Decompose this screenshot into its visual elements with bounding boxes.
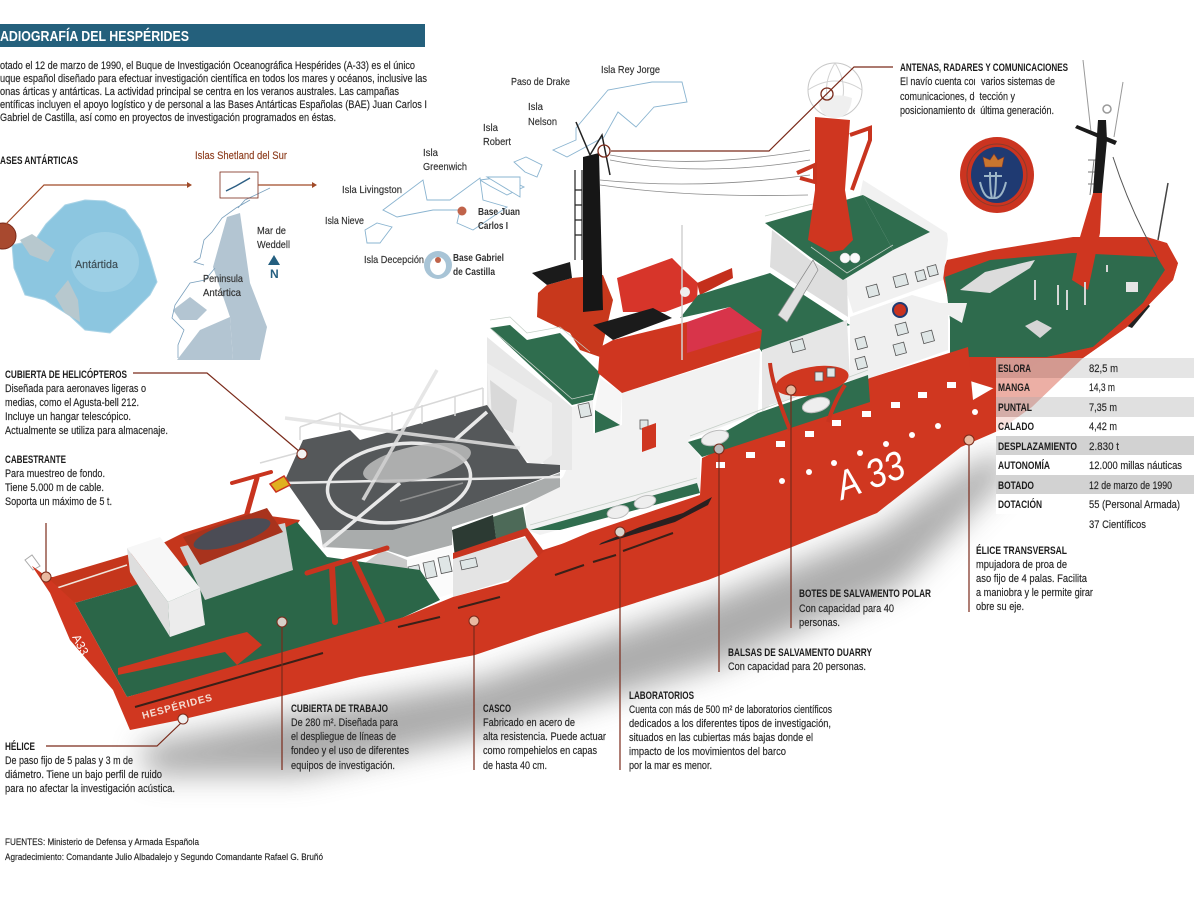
callout: laboratorios: LABORATORIOS bbox=[629, 690, 694, 702]
radar tower block bbox=[765, 180, 948, 317]
callout: antenas, radares y comunicaciones: El navío cuenta con varios sistemas de bbox=[900, 76, 1055, 88]
white container bbox=[127, 537, 205, 637]
table: ship specifications: 55 (Personal Armada) bbox=[1089, 499, 1180, 511]
callout: cubierta de helicópteros: Incluye un hangar telescópico. bbox=[5, 411, 131, 423]
intro text: uque español diseñado para efectuar investigación científica en todos los mares y océanos, inclusive las bbox=[0, 73, 427, 85]
map heading: bases antárticas: ASES ANTÁRTICAS bbox=[0, 154, 78, 167]
hull portholes bbox=[716, 382, 978, 484]
map labels: Isla Rey Jorge bbox=[601, 64, 660, 76]
sources: Agradecimiento: Comandante Julio Albadalejo y Segundo Comandante Rafael G. Bruñó bbox=[5, 852, 323, 862]
map arrow: locator to islands bbox=[258, 182, 317, 188]
callout: cabestrante: Tiene 5.000 m de cable. bbox=[5, 482, 104, 494]
callout: casco: Fabricado en acero de bbox=[483, 717, 575, 729]
callout: cabestrante: Soporta un máximo de 5 t. bbox=[5, 496, 112, 508]
callout: laboratorios: impacto de los movimientos del barco bbox=[629, 746, 786, 758]
mid white block bbox=[762, 295, 967, 412]
inset locator: South Shetland: Islas Shetland del Sur bbox=[195, 150, 287, 162]
callout: cubierta de helicópteros: medias, como el Agusta-bell 212. bbox=[5, 397, 139, 409]
callout: laboratorios: Cuenta con más de 500 m² de laboratorios científicos bbox=[629, 704, 832, 716]
stern marking: A33: A33 bbox=[69, 632, 92, 658]
callout: cabestrante bbox=[5, 454, 112, 582]
flag bbox=[270, 476, 290, 492]
map labels: Isla bbox=[483, 122, 498, 134]
callout: cabestrante: Para muestreo de fondo. bbox=[5, 468, 105, 480]
map labels: Nelson bbox=[528, 116, 557, 128]
callout: cubierta de trabajo: el despliegue de líneas de bbox=[291, 731, 396, 743]
radar mast bbox=[797, 63, 870, 263]
callout: casco: alta resistencia. Puede actuar bbox=[483, 731, 606, 743]
sources bbox=[5, 837, 323, 862]
hangar roof deck bbox=[490, 325, 600, 405]
rub rail dashes bbox=[135, 533, 673, 707]
table: ship specifications: 14,3 m bbox=[1089, 382, 1115, 394]
map labels: Isla Livingston bbox=[342, 184, 402, 196]
map: Antarctic Peninsula bbox=[172, 188, 270, 360]
middle green deck bbox=[680, 273, 850, 352]
callout: botes de salvamento polar bbox=[786, 385, 931, 629]
table: ship specifications: AUTONOMÍA bbox=[998, 459, 1050, 472]
inset locator: South Shetland bbox=[195, 150, 287, 198]
aft crane bbox=[232, 472, 271, 517]
callout: laboratorios: situados en las cubiertas más bajas donde el bbox=[629, 732, 813, 744]
helideck understructure bbox=[320, 473, 580, 607]
callout: hélice transversal: a maniobra y le permite girar bbox=[976, 587, 1093, 599]
hangar bbox=[487, 363, 552, 468]
callout: cubierta de trabajo bbox=[277, 617, 409, 772]
sources: FUENTES: Ministerio de Defensa y Armada Española bbox=[5, 837, 199, 847]
map: South Shetland Islands bbox=[365, 82, 687, 279]
table: ship specifications: DESPLAZAMIENTO bbox=[998, 441, 1077, 453]
callout: cubierta de trabajo: De 280 m². Diseñada para bbox=[291, 717, 399, 729]
map labels: Base Gabriel bbox=[453, 252, 504, 264]
text: Mar de Weddell: Weddell bbox=[257, 239, 290, 251]
rear funnel block bbox=[532, 258, 733, 357]
map: Antarctica continent bbox=[0, 200, 157, 333]
lab window recess bbox=[599, 497, 712, 545]
grey container bbox=[180, 523, 293, 600]
callout: laboratorios: por la mar es menor. bbox=[629, 760, 712, 772]
callout: botes de salvamento polar: Con capacidad para 40 bbox=[799, 603, 894, 615]
callout: hélice bbox=[5, 714, 188, 795]
table: ship specifications: 2.830 t bbox=[1089, 441, 1119, 453]
hull bbox=[32, 263, 1178, 730]
table: ship specifications: 12.000 millas náuticas bbox=[1089, 460, 1182, 472]
forward red block bbox=[593, 225, 762, 393]
text: Mar de Weddell bbox=[257, 225, 290, 251]
hull marking: HESPÉRIDES: HESPÉRIDES bbox=[140, 691, 214, 722]
callout: balsas de salvamento Duarry: Con capacidad para 20 personas. bbox=[728, 661, 866, 673]
fore deck bbox=[945, 253, 1165, 357]
callout: laboratorios: dedicados a los diferentes tipos de investigación, bbox=[629, 718, 831, 730]
intro text: otado el 12 de marzo de 1990, el Buque de Investigación Oceanográfica Hespérides (A-33) es el único bbox=[0, 60, 415, 72]
callout: laboratorios bbox=[615, 527, 832, 772]
callout: hélice: diámetro. Tiene un bajo perfil de ruido bbox=[5, 769, 162, 781]
intro text: onas árticas y antárticas. La actividad principal se centra en los veranos australes. Las campañas bbox=[0, 86, 399, 98]
foremast bbox=[1072, 60, 1168, 290]
map labels: Paso de Drake bbox=[511, 76, 570, 88]
title bar bbox=[0, 24, 425, 47]
callout: hélice transversal: obre su eje. bbox=[976, 601, 1024, 613]
callout: casco: CASCO bbox=[483, 703, 511, 715]
boat in cradle bbox=[183, 508, 283, 565]
intro text bbox=[0, 60, 427, 124]
callout: cubierta de trabajo: equipos de investigación. bbox=[291, 760, 395, 772]
table: ship specifications: CALADO bbox=[998, 421, 1034, 433]
map labels: Isla bbox=[528, 101, 543, 113]
table: ship specifications: 12 de marzo de 1990 bbox=[1089, 480, 1172, 492]
table: ship specifications: PUNTAL bbox=[998, 402, 1032, 414]
callout: hélice transversal: ÉLICE TRANSVERSAL bbox=[976, 544, 1067, 557]
callout: casco: de hasta 40 cm. bbox=[483, 760, 547, 772]
callout: hélice transversal bbox=[964, 435, 1093, 613]
T-frame bbox=[307, 548, 387, 622]
callout: botes de salvamento polar: personas. bbox=[799, 617, 840, 629]
map: Antarctic Peninsula: Antártica bbox=[203, 287, 241, 299]
table: ship specifications bbox=[996, 358, 1194, 531]
black aft mast bbox=[575, 122, 610, 312]
table: ship specifications: 7,35 m bbox=[1089, 402, 1117, 414]
callout: cubierta de helicópteros: Diseñada para aeronaves ligeras o bbox=[5, 383, 146, 395]
map labels: de Castilla bbox=[453, 266, 495, 278]
hull marking: A33: A 33 bbox=[828, 443, 911, 509]
table: ship specifications: 4,42 m bbox=[1089, 421, 1117, 433]
callout: antenas, radares y comunicaciones bbox=[598, 62, 1068, 157]
map labels: Robert bbox=[483, 136, 511, 148]
superstructure white wall bbox=[487, 337, 760, 535]
map labels: Isla bbox=[423, 147, 438, 159]
callout: hélice: De paso fijo de 5 palas y 3 m de bbox=[5, 755, 133, 767]
callout: cabestrante: CABESTRANTE bbox=[5, 454, 66, 466]
icon: north arrow: N bbox=[270, 267, 279, 281]
map: Antarctica continent: Antártida bbox=[75, 259, 119, 271]
map labels: Isla Nieve bbox=[325, 215, 364, 227]
callout: casco bbox=[469, 616, 606, 772]
side deck strips bbox=[530, 370, 870, 530]
aft mast cables bbox=[600, 150, 810, 196]
work deck crane arm bbox=[118, 632, 262, 675]
map labels: Greenwich bbox=[423, 161, 467, 173]
callout: cubierta de helicópteros: Actualmente se utiliza para almacenaje. bbox=[5, 425, 168, 437]
map labels: Isla Decepción bbox=[364, 254, 424, 266]
helicopter bbox=[285, 370, 520, 501]
callout: balsas de salvamento Duarry bbox=[714, 444, 872, 673]
intro text: entíficas incluyen el apoyo logístico y de personal a las Bases Antárticas Españolas (BAE) Juan Carlos I bbox=[0, 99, 427, 111]
intro text: Gabriel de Castilla, así como en proyectos de investigación programados en éstas. bbox=[0, 112, 336, 124]
hull shadow bbox=[140, 452, 1010, 775]
callout: hélice transversal: mpujadora de proa de bbox=[976, 559, 1067, 571]
table: ship specifications: BOTADO bbox=[998, 480, 1034, 492]
callout: cubierta de trabajo: CUBIERTA DE TRABAJO bbox=[291, 703, 388, 715]
fore deck fittings bbox=[960, 260, 1150, 338]
ship illustration bbox=[25, 60, 1178, 775]
table: ship specifications: MANGA bbox=[998, 382, 1030, 394]
callout: balsas de salvamento Duarry: BALSAS DE SALVAMENTO DUARRY bbox=[728, 647, 872, 659]
callout: botes de salvamento polar: BOTES DE SALVAMENTO POLAR bbox=[799, 588, 931, 600]
icon: north arrow bbox=[268, 255, 280, 281]
callout: hélice: para no afectar la investigación acústica. bbox=[5, 783, 175, 795]
map labels: Base Juan bbox=[478, 206, 520, 218]
text: Mar de Weddell: Mar de bbox=[257, 225, 286, 237]
map: Antarctic Peninsula: Peninsula bbox=[203, 273, 243, 285]
table: ship specifications: DOTACIÓN bbox=[998, 498, 1042, 511]
callout: antenas, radares y comunicaciones: ANTENAS, RADARES Y COMUNICACIONES bbox=[900, 62, 1068, 74]
stern back rim bbox=[25, 513, 300, 603]
map labels bbox=[325, 64, 660, 278]
map arrow: continent to peninsula bbox=[5, 182, 192, 225]
callout: cubierta de trabajo: fondeo y el uso de diferentes bbox=[291, 745, 409, 757]
callout: antenas, radares y comunicaciones: posicionamiento de última generación. bbox=[900, 105, 1054, 117]
callout: antenas, radares y comunicaciones: comunicaciones, detección y bbox=[900, 91, 1015, 103]
callout: cubierta de helicópteros: CUBIERTA DE HELICÓPTEROS bbox=[5, 368, 127, 381]
callout: casco: como rompehielos en capas bbox=[483, 745, 597, 757]
life rafts bbox=[606, 395, 831, 521]
callout: hélice: HÉLICE bbox=[5, 740, 35, 753]
table: ship specifications: 37 Científicos bbox=[1089, 519, 1146, 531]
table: ship specifications: ESLORA bbox=[998, 363, 1031, 375]
map labels: Carlos I bbox=[478, 220, 508, 232]
lifeboat bbox=[770, 361, 851, 430]
icon: navy badge bbox=[960, 137, 1034, 213]
fore deck rim bbox=[942, 237, 1178, 400]
helideck bbox=[260, 388, 560, 547]
ladder bbox=[778, 260, 818, 322]
callout: hélice transversal: aso fijo de 4 palas. Facilita bbox=[976, 573, 1088, 585]
title bar: ADIOGRAFÍA DEL HESPÉRIDES bbox=[0, 28, 189, 45]
callout: cubierta de helicópteros bbox=[5, 368, 307, 459]
stern work deck bbox=[75, 522, 440, 697]
table: ship specifications: 82,5 m bbox=[1089, 363, 1118, 375]
